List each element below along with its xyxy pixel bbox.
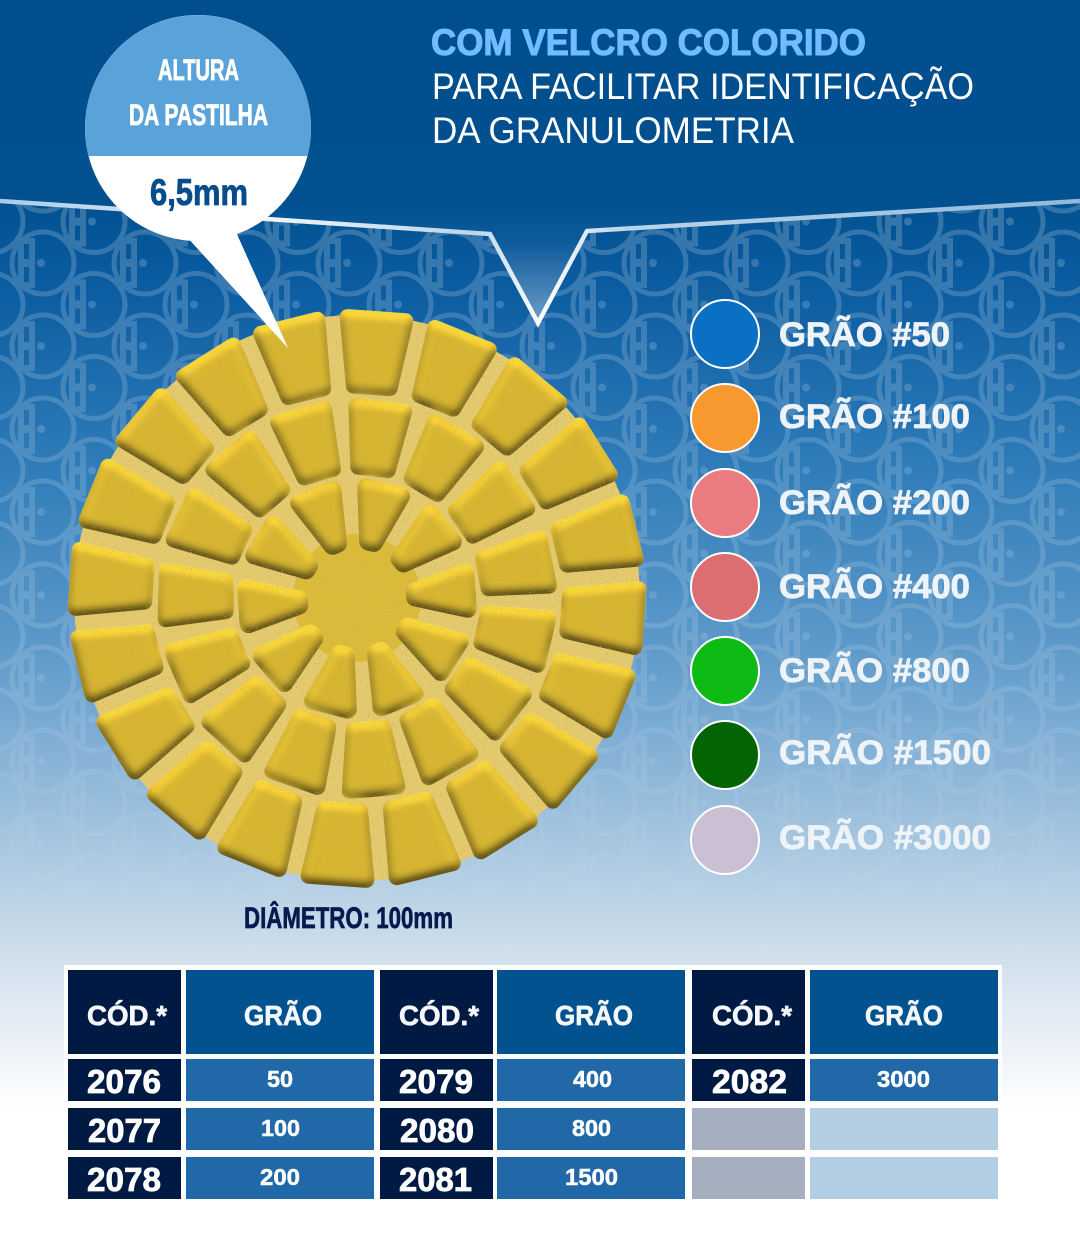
data row 1: 2079: [399, 1063, 473, 1100]
data row 2: 2077: [88, 1112, 161, 1149]
diameter caption: DIÂMETRO: 100mm: [244, 901, 453, 935]
title line 2: PARA FACILITAR IDENTIFICAÇÃO: [432, 66, 974, 107]
callout value: 6,5mm: [150, 172, 248, 213]
data row 1: [68, 1059, 998, 1101]
callout blue top: [85, 15, 311, 156]
legend item #200: GRÃO #200: [779, 484, 970, 522]
data row 1: 2082: [712, 1063, 787, 1100]
legend item #50: GRÃO #50: [779, 316, 950, 354]
legend item #1500: [691, 721, 991, 789]
callout white circle: [85, 15, 311, 241]
header row: [68, 970, 998, 1054]
header row: CÓD.*: [399, 1000, 479, 1031]
data row 1: 2076: [87, 1063, 161, 1100]
pad center disk: [293, 534, 421, 662]
legend: grit colours: [691, 300, 991, 874]
callout: pad height: [85, 15, 311, 348]
table frame: [64, 965, 1002, 1203]
data row 3: 1500: [565, 1164, 618, 1190]
header row: GRÃO: [244, 1000, 322, 1031]
title: [431, 22, 974, 151]
outer ring of segments: [76, 317, 638, 880]
callout label line 2: DA PASTILHA: [129, 99, 268, 132]
callout pointer: [186, 232, 288, 348]
speckle texture: [74, 315, 640, 881]
legend item #1500: GRÃO #1500: [779, 734, 991, 772]
pad base: [74, 315, 640, 881]
legend item #200: [691, 469, 970, 537]
product: yellow polishing pad: [74, 315, 640, 881]
background logo pattern: [0, 203, 1080, 771]
data row 2: 100: [261, 1115, 300, 1141]
data row 1: 3000: [877, 1066, 930, 1092]
middle ring of segments: [166, 406, 549, 791]
legend item #3000: GRÃO #3000: [779, 819, 991, 857]
pad segments: [76, 317, 638, 880]
data row 3: 2081: [399, 1161, 472, 1198]
legend item #3000: [691, 806, 991, 874]
data row 1: 50: [267, 1066, 293, 1092]
header row: GRÃO: [865, 1000, 943, 1031]
header row: CÓD.*: [87, 1000, 167, 1031]
legend item #100: [691, 384, 970, 452]
legend item #400: [691, 553, 970, 621]
data row 2: [68, 1108, 998, 1150]
header row: GRÃO: [555, 1000, 633, 1031]
header row: CÓD.*: [712, 1000, 792, 1031]
data row 3: 200: [260, 1164, 300, 1190]
title highlight line: COM VELCRO COLORIDO: [431, 22, 866, 63]
data row 1: 400: [573, 1066, 612, 1092]
data row 3: [68, 1157, 998, 1199]
legend item #50: [691, 300, 950, 368]
data row 2: 2080: [400, 1112, 474, 1149]
data row 2: 800: [572, 1115, 611, 1141]
inner ring of segments: [246, 487, 468, 710]
legend item #100: GRÃO #100: [779, 398, 970, 436]
data row 3: 2078: [87, 1161, 161, 1198]
legend item #400: GRÃO #400: [779, 568, 970, 606]
legend item #800: [691, 637, 970, 705]
legend item #800: GRÃO #800: [779, 652, 970, 690]
title line 3: DA GRANULOMETRIA: [432, 110, 794, 151]
callout label: ALTURA: [158, 54, 239, 87]
table: product codes: [64, 965, 1002, 1203]
header band with notch: [0, 0, 1080, 326]
